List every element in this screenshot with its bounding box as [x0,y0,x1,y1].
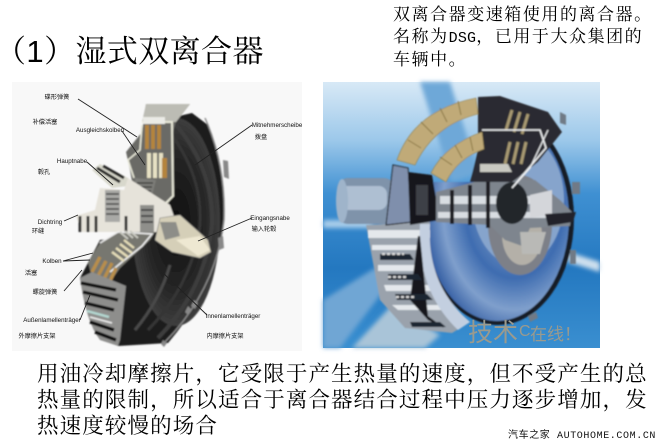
part labels: Innenlamellenträger [206,313,260,320]
note: DSG description: 名称为DSG，已用于大众集团的 [393,26,643,46]
friction arc outer [397,98,478,165]
part labels: 活塞 [25,269,37,277]
watermark [468,319,581,347]
part labels: Ausgleichskolben [76,127,125,134]
basket [366,222,470,333]
body text [37,362,648,438]
leader lines [63,99,252,320]
hub [436,178,572,246]
part labels: 环缝 [32,227,44,235]
part labels: 毂孔 [38,168,50,176]
part labels: Mitnehmerscheibe [252,122,303,129]
disc [429,143,575,326]
part labels [18,93,303,340]
part labels: Hauptnabe [57,158,88,165]
part labels: Dichtring [38,219,63,226]
drum arm [386,165,412,225]
part labels: 外摩擦片支架 [18,332,56,340]
watermark: 在线！ [530,325,581,344]
note: DSG description [393,5,653,69]
part labels: 螺旋弹簧 [33,288,57,296]
rim tabs [161,160,229,347]
note: DSG description: 双离合器变速箱使用的离合器。 [393,5,653,24]
upper section [126,104,190,205]
part labels: Außenlamellenträger [23,317,81,324]
note: DSG description: 车辆中。 [393,50,467,69]
source credit: 汽车之家 AUTOHOME.COM.CN [508,431,656,442]
part labels: 补偿活塞 [33,118,57,126]
rim bolts [528,112,580,322]
photo drawing [323,82,600,348]
upper pack [470,96,562,182]
part labels: 碟形弹簧 [45,93,69,101]
panel: blue clutch photo [323,82,600,348]
background beams [323,82,600,348]
input hub [155,215,211,258]
part labels: Eingangsnabe [250,215,290,222]
watermark: 技术 [468,319,518,347]
title: （1）湿式双离合器 [0,34,264,69]
part labels: Kolben [42,258,62,265]
part labels: 拨盘 [255,133,267,141]
hub [92,164,128,188]
part labels: 输入轮毂 [252,225,276,233]
part labels: 内摩擦片支架 [206,332,244,340]
shaft [337,178,395,224]
clutch cutaway drawing [76,104,229,347]
body text: 热速度较慢的场合 [37,414,218,438]
panel: labelled clutch cutaway [12,82,303,351]
lower section [88,232,155,282]
friction arc inner [431,132,484,182]
body text: 热量的限制，所以适合于离合器结合过程中压力逐步增加，发 [37,388,648,412]
bell housing [80,113,224,346]
body text: 用油冷却摩擦片，它受限于产生热量的速度，但不受产生的总 [37,362,648,386]
watermark: C [519,323,531,340]
